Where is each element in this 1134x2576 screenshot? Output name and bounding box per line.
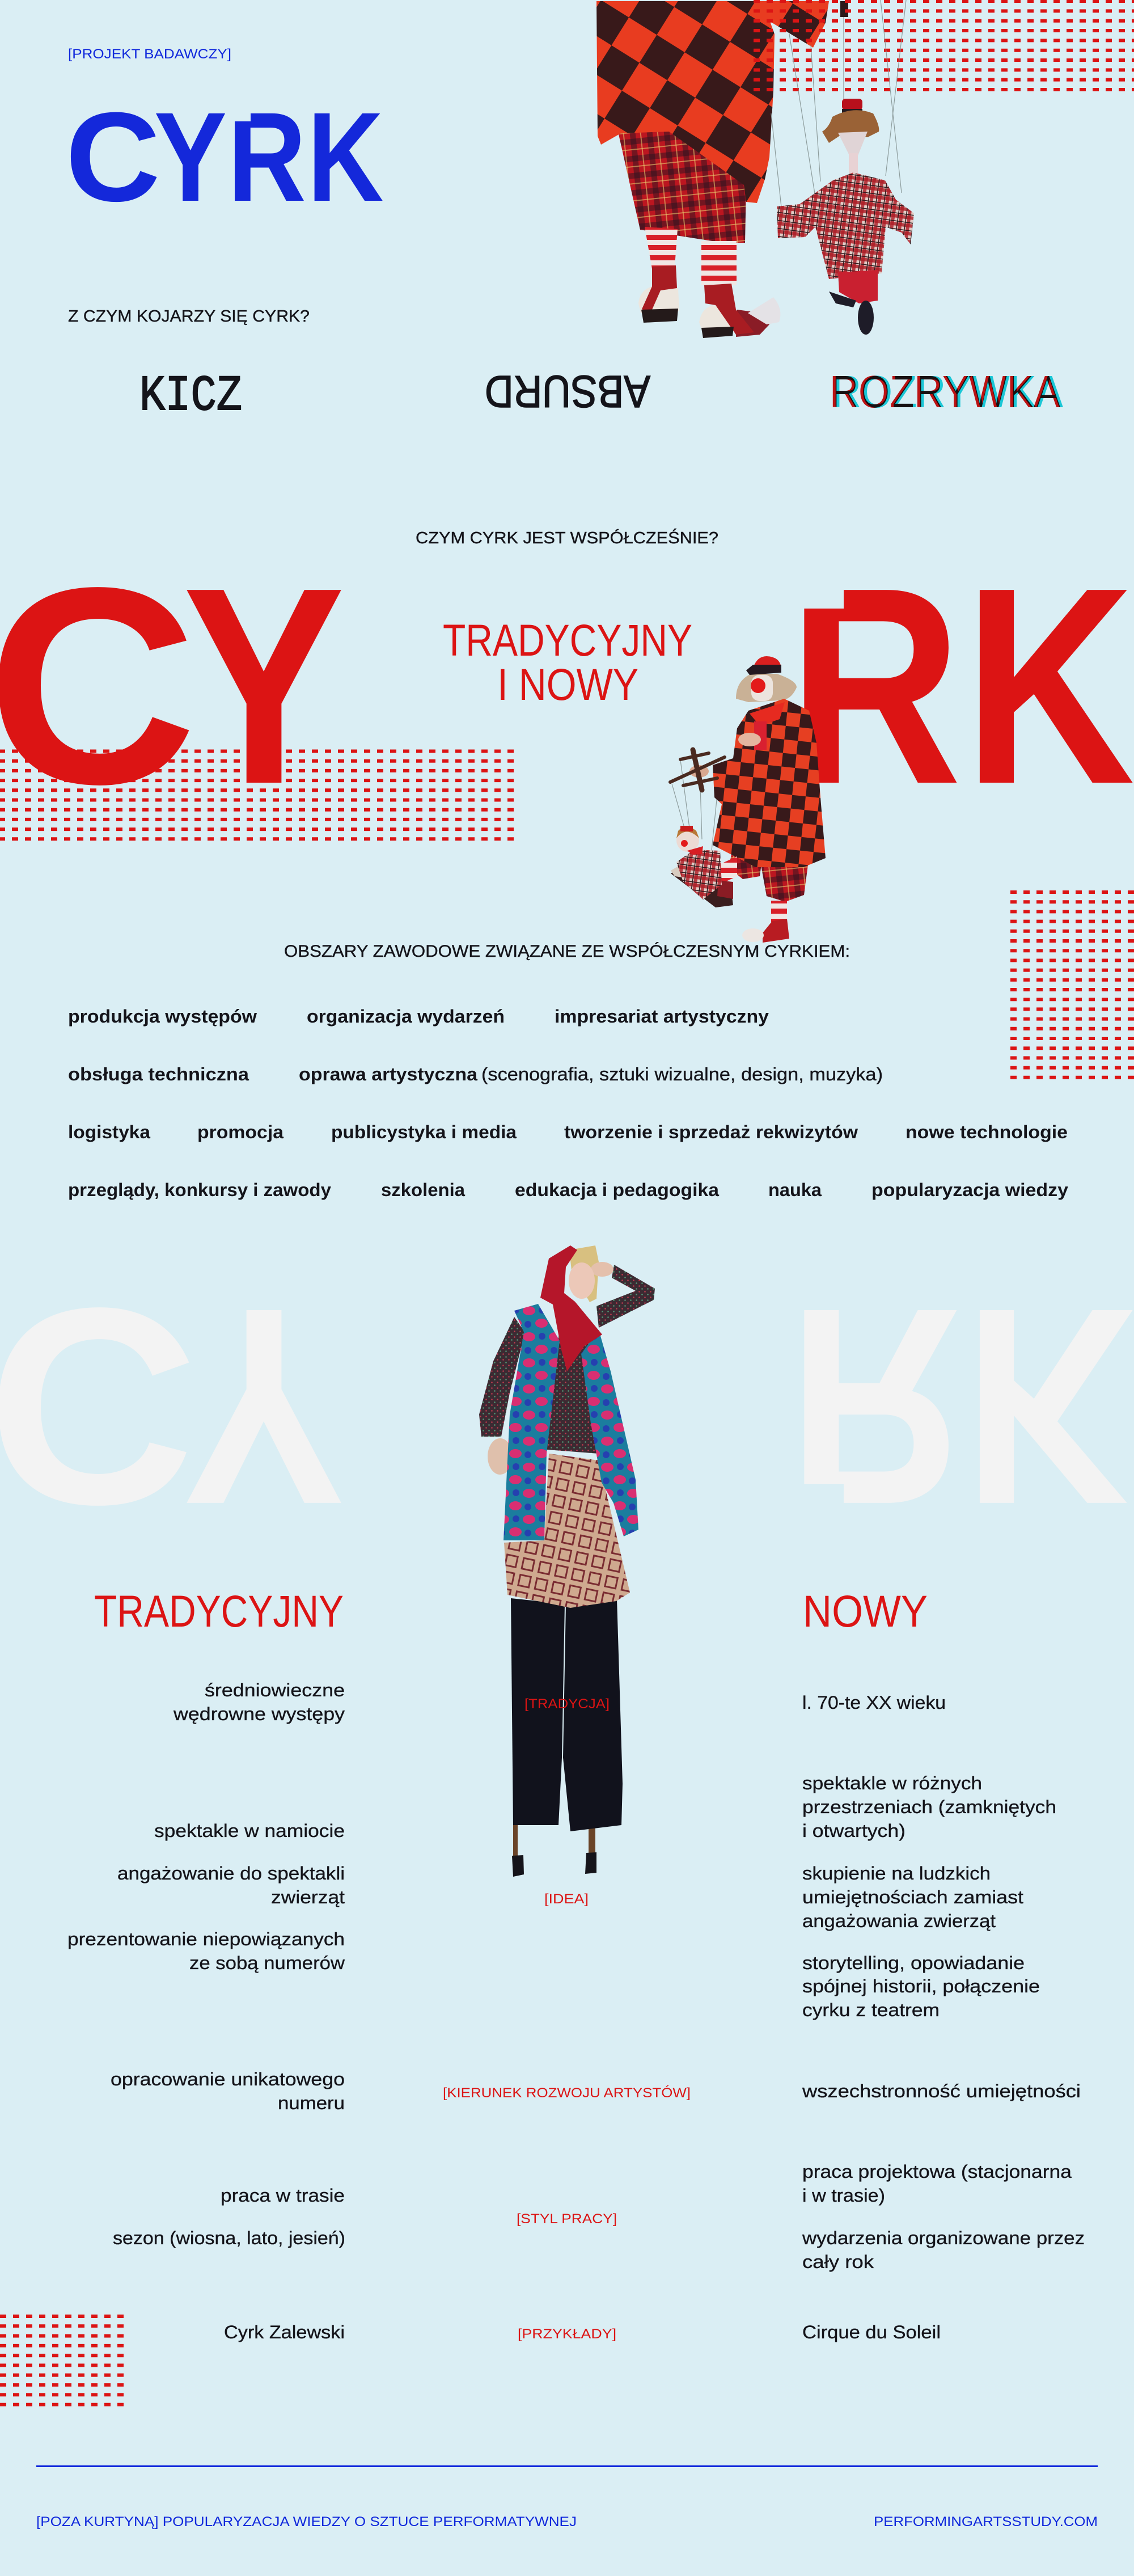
row 4 — [68, 1180, 1068, 1200]
dot pattern: right — [1010, 892, 1134, 1078]
marionette controller — [670, 750, 725, 790]
title: CYRK: C — [65, 87, 160, 228]
marionette on knee — [676, 826, 722, 900]
puppet hat — [842, 99, 862, 115]
stilt feet — [512, 1852, 596, 1877]
clown hat — [746, 656, 781, 675]
right text: praca projektowa: i w trasie) — [802, 2185, 885, 2206]
puppet jacket — [777, 172, 914, 279]
face — [569, 1262, 595, 1299]
row 1 — [68, 1006, 769, 1027]
left text: spektakle w namiocie: spektakle w namiocie — [154, 1821, 345, 1841]
row 2 — [68, 1064, 883, 1084]
heading: tradycyjny i nowy — [443, 615, 692, 710]
question: z czym kojarzy się cyrk: Z CZYM KOJARZY SIĘ CYRK? — [68, 307, 310, 326]
right text: spektakle w różnych przestrzeniach: spektakle w różnych — [802, 1773, 982, 1793]
blonde hair — [569, 1245, 599, 1302]
row 3: tworzenie i sprzedaż rekwizytów — [564, 1122, 858, 1142]
puppet shoes — [829, 292, 874, 335]
eyebrow: projekt badawczy: [PROJEKT BADAWCZY] — [68, 47, 231, 62]
stilts — [513, 1823, 595, 1857]
puppet face — [838, 132, 868, 160]
right text: praca projektowa: praca projektowa (stacjonarna — [802, 2161, 1072, 2182]
right text: spektakle w różnych przestrzeniach: i otwartych) — [802, 1821, 905, 1841]
row 1: organizacja wydarzeń — [307, 1006, 505, 1027]
black trousers — [511, 1598, 623, 1831]
right text: skupienie na ludzkich umiejętnościach: umiejętnościach zamiast — [802, 1887, 1023, 1907]
left text: angażowanie zwierząt: angażowanie do spektakli — [117, 1863, 345, 1884]
left text: angażowanie zwierząt: zwierząt — [271, 1887, 345, 1907]
left text: prezentowanie numerów: prezentowanie niepowiązanych — [67, 1929, 345, 1949]
row label: idea: [IDEA] — [544, 1891, 589, 1907]
right text: cirque du soleil: Cirque du Soleil — [802, 2322, 941, 2342]
faded letters: CY flipped — [0, 1250, 345, 1564]
left text: cyrk zalewski: Cyrk Zalewski — [224, 2322, 345, 2342]
photo: marionette puppet — [771, 0, 914, 335]
footer: website: PERFORMINGARTSSTUDY.COM — [874, 2514, 1098, 2529]
marionette strings — [771, 0, 906, 207]
question: czym cyrk jest współcześnie: CZYM CYRK JEST WSPÓŁCZEŚNIE? — [416, 528, 718, 547]
left text: praca w trasie: praca w trasie — [221, 2185, 345, 2206]
right text: spektakle w różnych przestrzeniach: przestrzeniach (zamkniętych — [802, 1797, 1056, 1817]
row 4: edukacja i pedagogika — [515, 1180, 719, 1200]
photo: clown legs in checkered coat — [596, 1, 848, 338]
puppet neck — [849, 153, 858, 174]
right text: storytelling — [802, 1953, 1040, 2020]
bow tie and hand — [689, 702, 785, 778]
faded letters: RK flipped — [788, 1251, 1134, 1564]
word: ROZRYWKA anaglyph: ROZRYWKA — [832, 366, 1064, 417]
big letters: CY: Y — [183, 530, 345, 843]
faded letters: RK flipped: K — [964, 1251, 1134, 1564]
row 4: popularyzacja wiedzy — [871, 1180, 1068, 1200]
row 3: promocja — [197, 1122, 284, 1142]
right text: skupienie na ludzkich umiejętnościach — [802, 1863, 1023, 1931]
right text: l. 70-te XX wieku: l. 70-te XX wieku — [802, 1692, 946, 1713]
footer: source left: [POZA KURTYNĄ] POPULARYZACJA WIEDZY O SZTUCE PERFORMATYWNEJ — [36, 2514, 577, 2529]
right text: storytelling: storytelling, opowiadanie — [802, 1953, 1025, 1973]
row 3: publicystyka i media — [331, 1122, 517, 1142]
right text: skupienie na ludzkich umiejętnościach: skupienie na ludzkich — [802, 1863, 991, 1884]
row 2: obsługa techniczna — [68, 1064, 249, 1084]
faded letters: CY flipped: Y — [183, 1250, 345, 1563]
checkered coat — [596, 1, 775, 203]
left clown boot — [638, 265, 679, 323]
row label: kierunek rozwoju artystów: [KIERUNEK ROZWOJU ARTYSTÓW] — [443, 2085, 691, 2101]
right text: wydarzenia przez cały rok: wydarzenia organizowane przez — [802, 2228, 1085, 2248]
puppet hair — [822, 110, 879, 143]
row 2: oprawa artystyczna — [299, 1064, 477, 1084]
row 4: przeglądy, konkursy i zawody — [68, 1180, 331, 1200]
striped socks — [645, 227, 737, 285]
left text: opracowanie unikatowego numeru: opracowanie unikatowego — [111, 2069, 345, 2089]
left text: średniowieczne wędrowne występy: średniowieczne — [205, 1680, 345, 1700]
left text: opracowanie unikatowego numeru — [111, 2069, 345, 2113]
clown hair — [736, 674, 797, 702]
photo: woman on stilts — [479, 1245, 655, 1877]
right text: skupienie na ludzkich umiejętnościach: angażowania zwierząt — [802, 1911, 996, 1931]
right text: storytelling: cyrku z teatrem — [802, 2000, 940, 2020]
dot pattern: middle left — [0, 751, 514, 839]
sleeve: left arm — [479, 1317, 525, 1437]
coat sleeve tip — [751, 1, 829, 48]
list: professional areas — [68, 1006, 1068, 1200]
right text: wydarzenia przez cały rok — [802, 2228, 1085, 2272]
left text: angażowanie zwierząt — [117, 1863, 345, 1907]
red headscarf — [540, 1245, 602, 1371]
big letters: RK: R — [788, 529, 962, 842]
title: CYRK: K — [307, 86, 383, 228]
heading: obszary zawodowe: OBSZARY ZAWODOWE ZWIĄZANE ZE WSPÓŁCZESNYM CYRKIEM: — [284, 942, 850, 961]
title: CYRK: R — [227, 86, 306, 228]
row 2: (scenografia, sztuki wizualne, design, muzyka) — [481, 1064, 883, 1084]
row label: tradycja: [TRADYCJA] — [524, 1696, 610, 1712]
right text: storytelling: spójnej historii, połączenie — [802, 1976, 1040, 1996]
faded letters: RK flipped: R — [788, 1251, 962, 1564]
checkered coat — [713, 699, 826, 867]
row 3 — [68, 1122, 1068, 1142]
word: ABSURD upside down: ABSURD — [485, 366, 650, 417]
right boot — [742, 919, 789, 943]
dot pattern: top right — [754, 1, 1134, 90]
left text: prezentowanie numerów — [67, 1929, 345, 1973]
big letters: CY — [0, 529, 345, 843]
left text: prezentowanie numerów: ze sobą numerów — [189, 1953, 345, 1973]
right clown boot — [699, 284, 780, 338]
left text: średniowieczne wędrowne występy: wędrowne występy — [173, 1704, 345, 1724]
back leg — [729, 828, 765, 879]
row 3: nowe technologie — [905, 1122, 1068, 1142]
photo: clown with marionette — [670, 656, 826, 943]
heading: tradycyjny i nowy: I NOWY — [497, 659, 638, 710]
hand on head — [591, 1262, 613, 1277]
row label: styl pracy: [STYL PRACY] — [517, 2211, 617, 2227]
left text: sezon: sezon (wiosna, lato, jesień) — [113, 2228, 345, 2248]
right text: wszechstronność umiejętności: wszechstronność umiejętności — [802, 2081, 1081, 2101]
big letters: RK — [788, 529, 1134, 842]
heading: nowy column: NOWY — [803, 1586, 928, 1636]
left text: opracowanie unikatowego numeru: numeru — [278, 2093, 345, 2113]
knickers — [761, 865, 808, 902]
dark blouse — [547, 1327, 599, 1454]
right text: praca projektowa — [802, 2161, 1072, 2206]
bent leg sock — [718, 856, 737, 884]
heading: tradycyjny i nowy: TRADYCYJNY — [443, 615, 692, 665]
title: CYRK — [65, 86, 383, 228]
heading: tradycyjny column: TRADYCYJNY — [94, 1586, 344, 1636]
row 4: szkolenia — [381, 1180, 465, 1200]
plaid trousers — [618, 130, 746, 243]
right text: spektakle w różnych przestrzeniach — [802, 1773, 1056, 1841]
sleeve: raised arm — [596, 1265, 655, 1328]
left hand — [488, 1438, 513, 1475]
clown face — [751, 675, 773, 701]
word: KICZ: KICZ — [139, 369, 242, 425]
row 1: produkcja występów — [68, 1006, 257, 1027]
patterned skirt — [504, 1454, 630, 1608]
row 3: logistyka — [68, 1122, 150, 1142]
row 4: nauka — [768, 1180, 822, 1200]
right striped sock — [771, 901, 787, 922]
puppet trousers — [838, 270, 878, 303]
control strings — [672, 760, 717, 851]
word: ROZRYWKA anaglyph: ROZRYWKA — [830, 366, 1061, 417]
dot pattern: bottom left — [0, 2316, 124, 2405]
big letters: RK: K — [964, 529, 1134, 842]
row label: przykłady: [PRZYKŁADY] — [518, 2326, 616, 2342]
hand piece — [840, 1, 848, 17]
left text: średniowieczne wędrowne występy — [173, 1680, 345, 1724]
right text: wydarzenia przez cały rok: cały rok — [802, 2252, 874, 2272]
title: CYRK: Y — [154, 86, 227, 228]
floral vest — [503, 1304, 638, 1540]
held shoe and sole — [671, 865, 733, 907]
row 1: impresariat artystyczny — [555, 1006, 769, 1027]
